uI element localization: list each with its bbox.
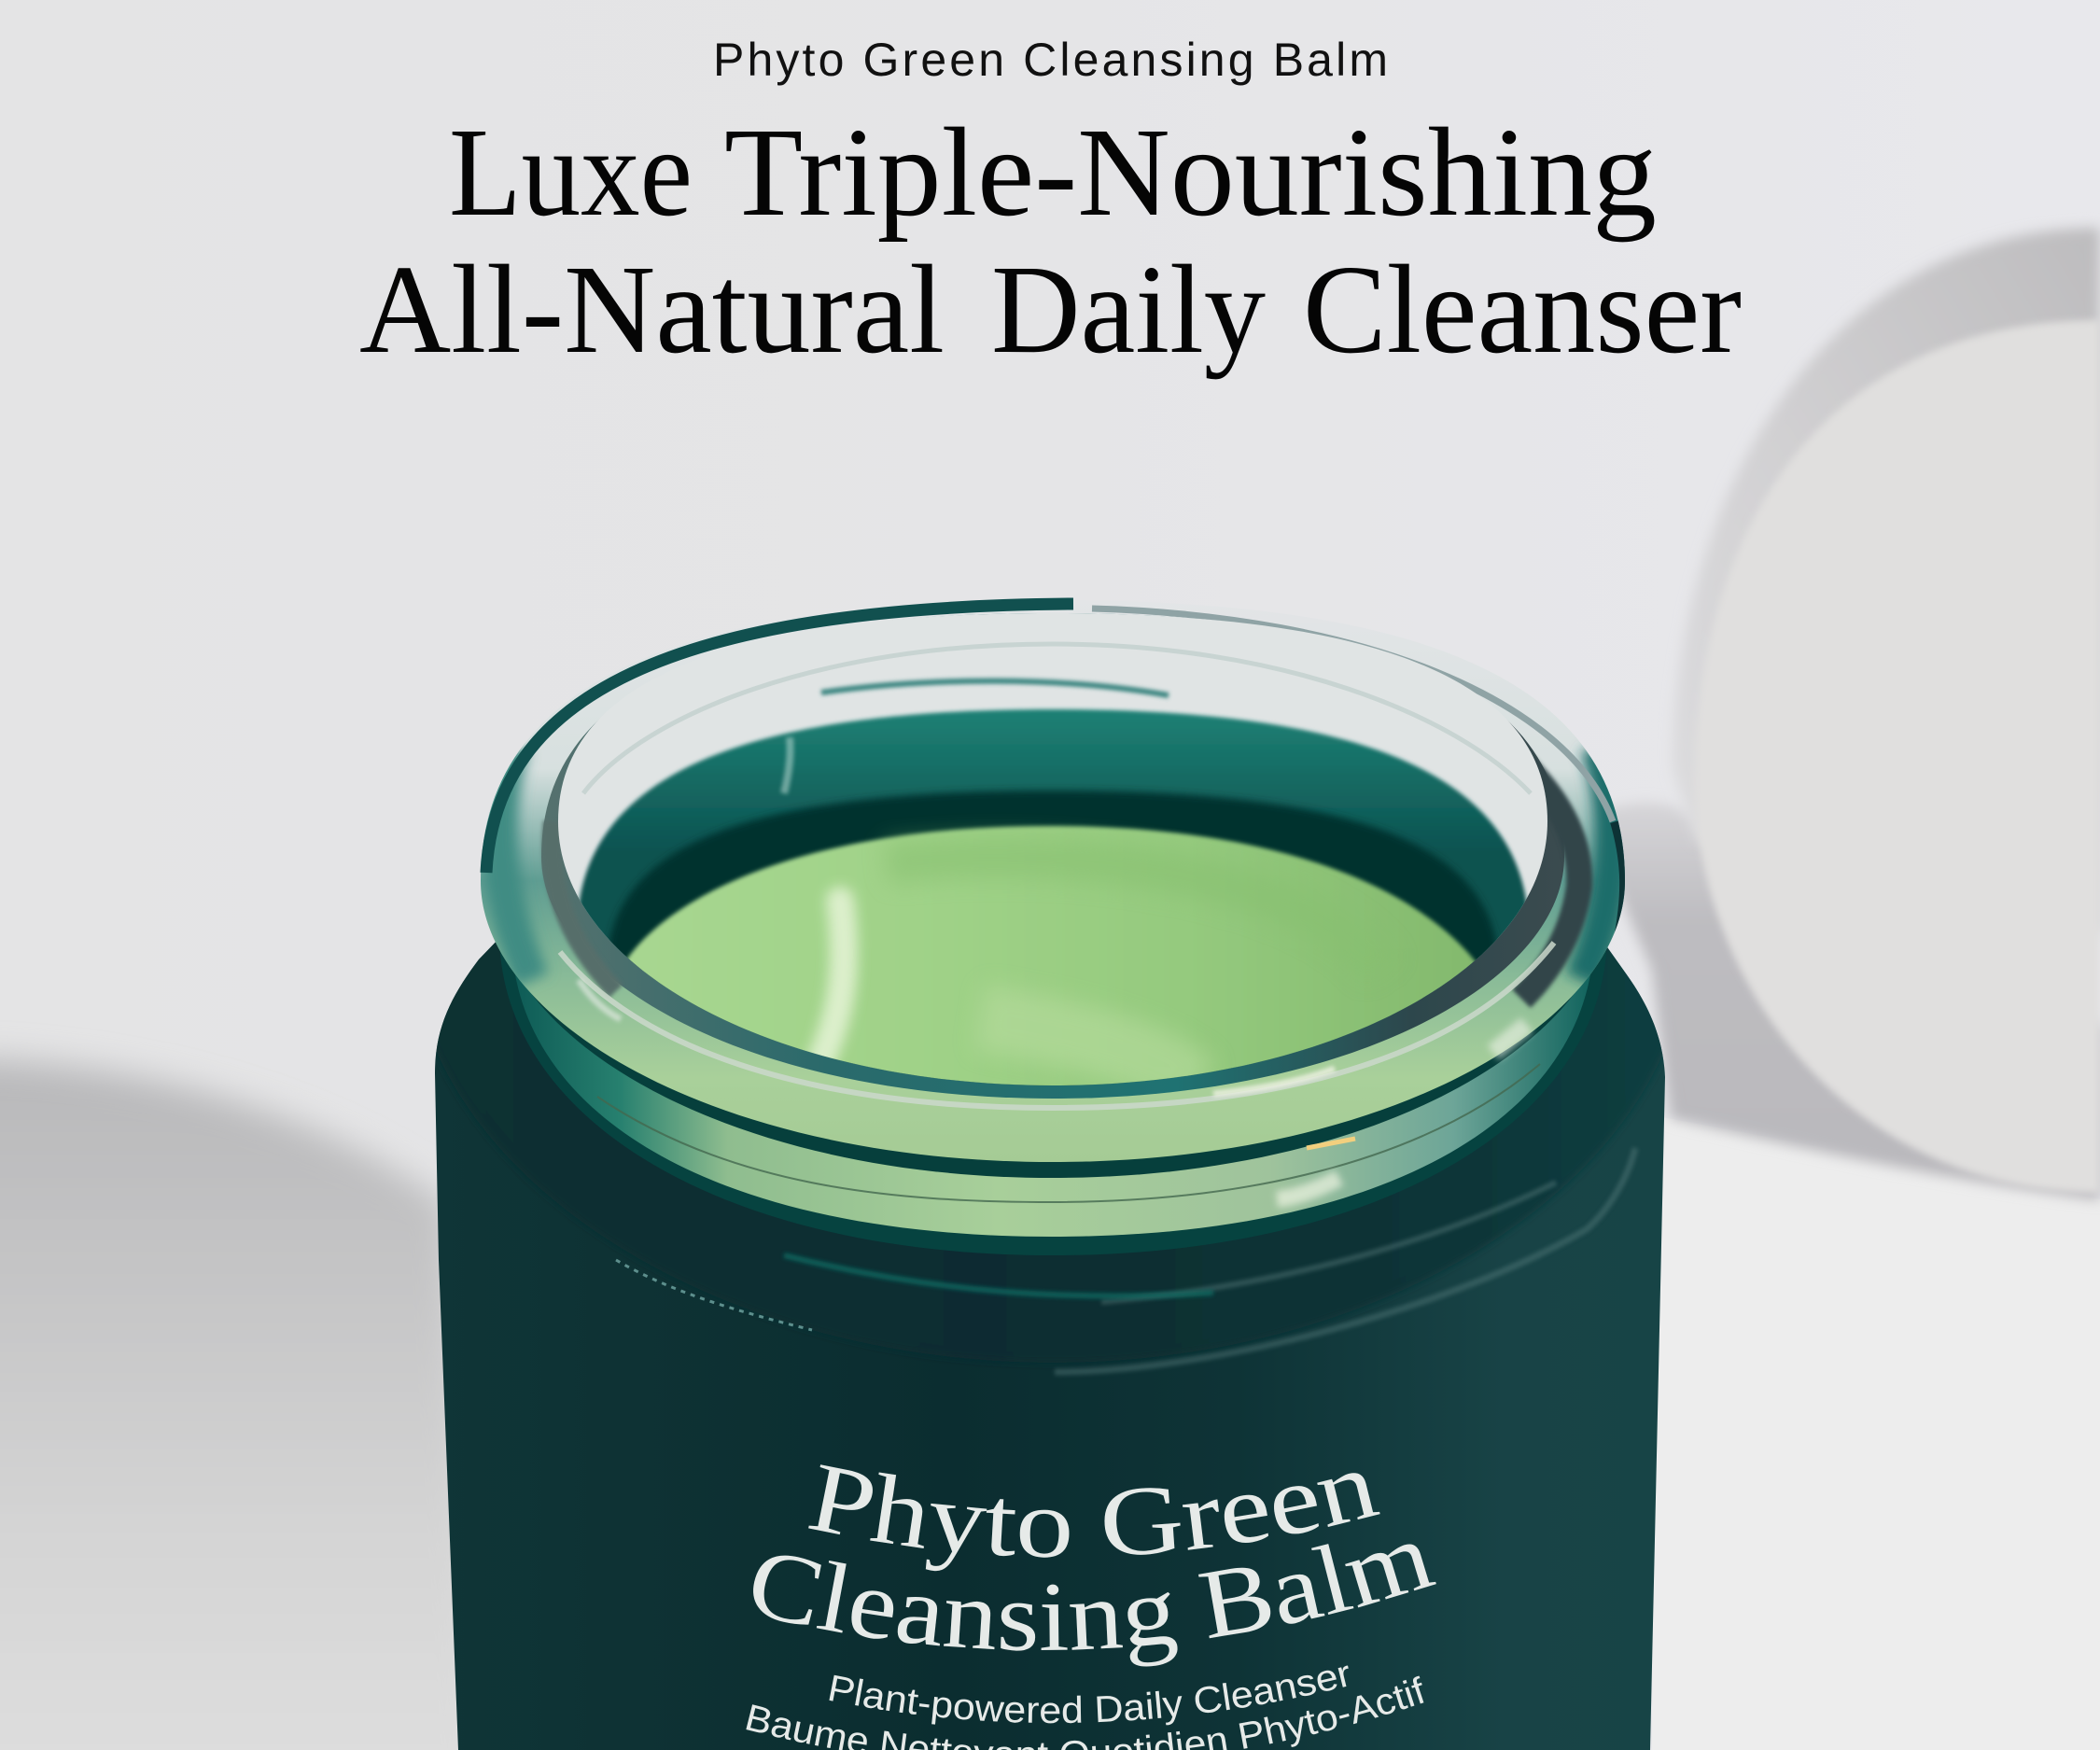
jar interior with balm — [558, 613, 1547, 1120]
jar body — [435, 933, 1665, 1750]
top rim edge — [486, 604, 1073, 873]
headline: All-Natural — [359, 240, 945, 380]
headline: Daily — [991, 240, 1266, 380]
headline — [359, 103, 1742, 380]
lip side shading — [500, 747, 1626, 980]
balm surface — [625, 823, 1477, 1085]
inner rim band — [541, 613, 1564, 1099]
jar lid — [1673, 228, 2100, 1193]
glass lip — [481, 600, 1626, 1162]
left cast shadow — [0, 1059, 485, 1750]
headline: Triple-Nourishing — [724, 103, 1657, 243]
label: product name: Phyto Green — [808, 1464, 1380, 1572]
teal balm wall — [577, 709, 1529, 1120]
label: descriptor: Plant-powered Daily Cleanser — [829, 1665, 1349, 1725]
lid rim — [1673, 228, 2100, 933]
lid cast shadow on wall — [1587, 803, 2100, 1200]
balm highlight — [821, 901, 844, 1059]
headline: Cleanser — [1303, 240, 1742, 380]
jar label: Cleansing Balm — [753, 1544, 1436, 1667]
jar shoulder collar — [411, 933, 1689, 1372]
glass glare highlights — [579, 980, 1527, 1199]
dark shadow inside jar — [607, 791, 1499, 1120]
glass neck — [495, 896, 1611, 1255]
glass edge hairline — [560, 943, 1554, 1108]
jar label — [746, 1464, 1436, 1750]
headline: Luxe — [449, 103, 693, 243]
subtitle: Phyto Green Cleansing Balm — [713, 34, 1388, 86]
jar — [435, 597, 1665, 1750]
lid face — [1695, 320, 2100, 1193]
